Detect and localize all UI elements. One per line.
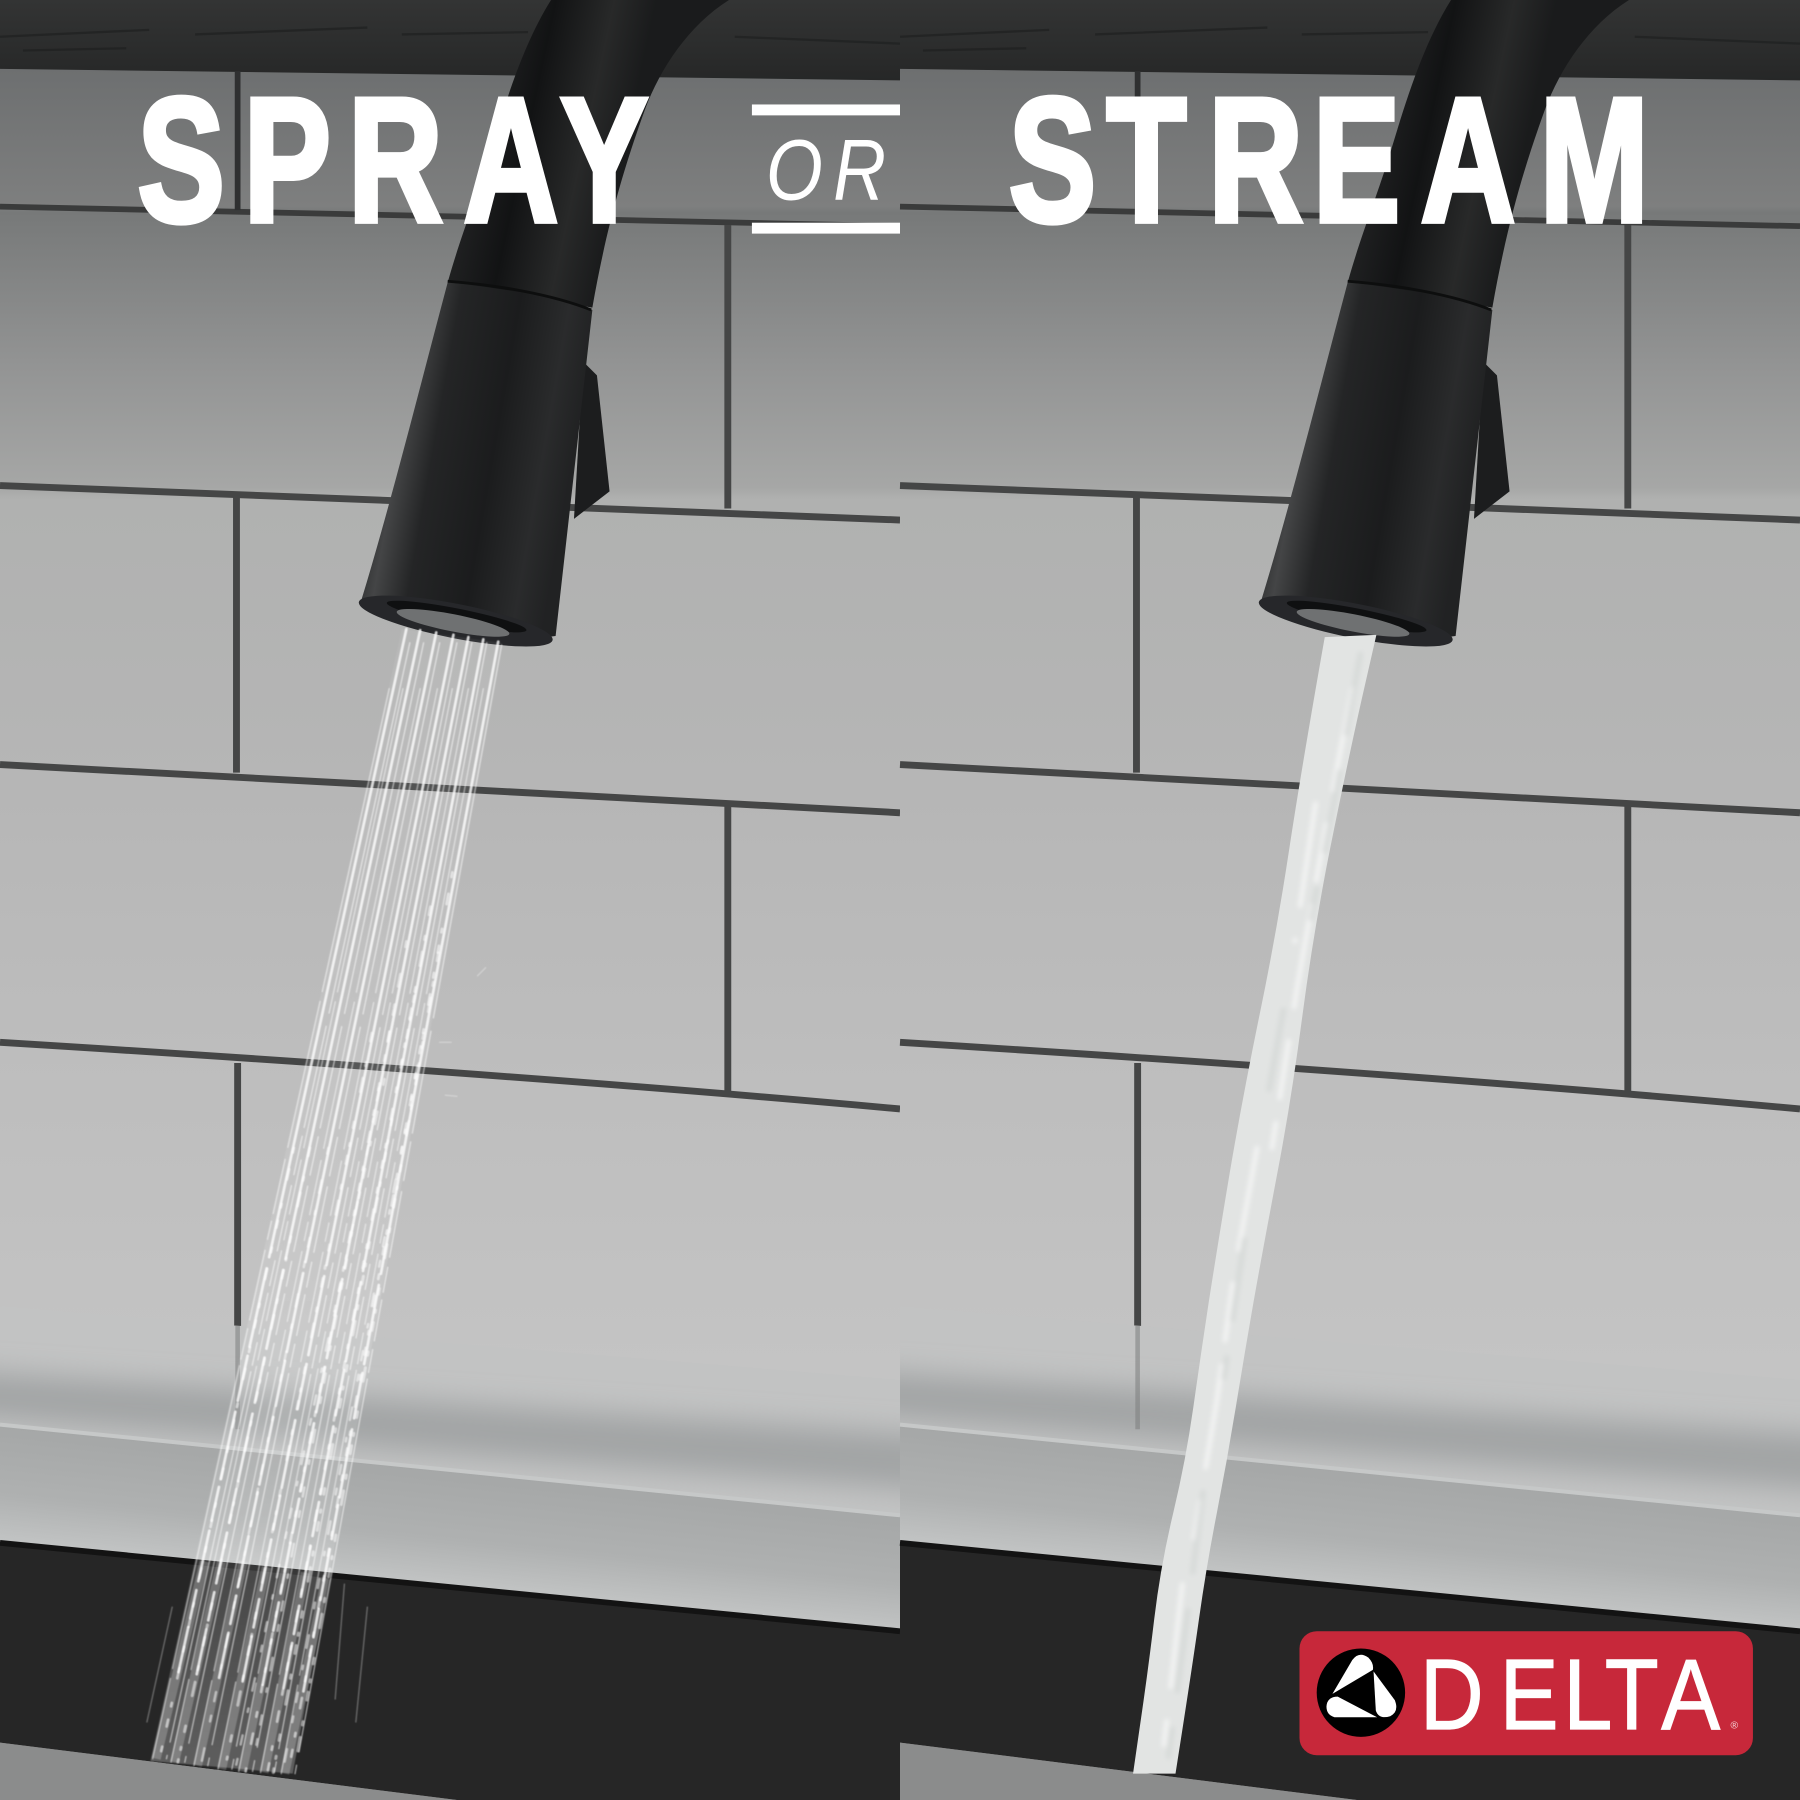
spray droplets group three xyxy=(201,941,424,1774)
dark sink xyxy=(0,1542,900,1800)
panel: spray side xyxy=(0,0,900,1800)
spray droplets group one xyxy=(160,872,452,1774)
panel: stream side xyxy=(785,0,1800,1800)
logo red badge xyxy=(1299,1631,1753,1755)
upper cabinet shadow band xyxy=(0,0,900,80)
divider top rule xyxy=(752,104,900,115)
faucet aerator rim xyxy=(356,585,556,657)
OR label: OR xyxy=(766,122,886,218)
OR divider xyxy=(752,104,900,234)
spray water xyxy=(147,629,502,1774)
spray haze xyxy=(150,629,502,1774)
divider bottom rule xyxy=(752,223,900,234)
sink rim sliver xyxy=(0,1743,457,1800)
kitchen scene with faucet, right xyxy=(785,0,1800,1800)
grout lines xyxy=(0,71,900,1326)
faucet joint line xyxy=(448,281,591,310)
faucet spray head xyxy=(362,282,592,638)
countertop edge highlight xyxy=(0,1425,900,1515)
spray droplets group two xyxy=(178,907,439,1774)
stream body xyxy=(1133,635,1376,1774)
sink-zone water mass xyxy=(156,1561,326,1774)
countertop back surface xyxy=(0,1306,900,1516)
sink top shadow xyxy=(0,1543,900,1631)
countertop reflection band xyxy=(0,1326,1015,1497)
faucet neck xyxy=(448,0,729,308)
kitchen scene with faucet xyxy=(0,0,1015,1800)
heading: STREAM: STREAM xyxy=(1009,61,1649,258)
stream streaks xyxy=(1164,654,1360,1756)
heading: SPRAY: SPRAY xyxy=(138,61,648,258)
stray spray droplets xyxy=(147,968,486,1722)
logo: Delta xyxy=(1299,1631,1753,1755)
main spray strands xyxy=(160,629,498,1774)
icon: Delta triangle mark xyxy=(1317,1648,1405,1737)
companion spray strands xyxy=(166,643,502,1774)
registered mark: ® xyxy=(1731,1720,1739,1731)
stream water xyxy=(1133,635,1376,1774)
faucet trigger button xyxy=(574,362,610,519)
tile wall xyxy=(0,57,900,1389)
logo wordmark: DELTA xyxy=(1420,1639,1720,1751)
countertop front edge xyxy=(0,1426,900,1630)
